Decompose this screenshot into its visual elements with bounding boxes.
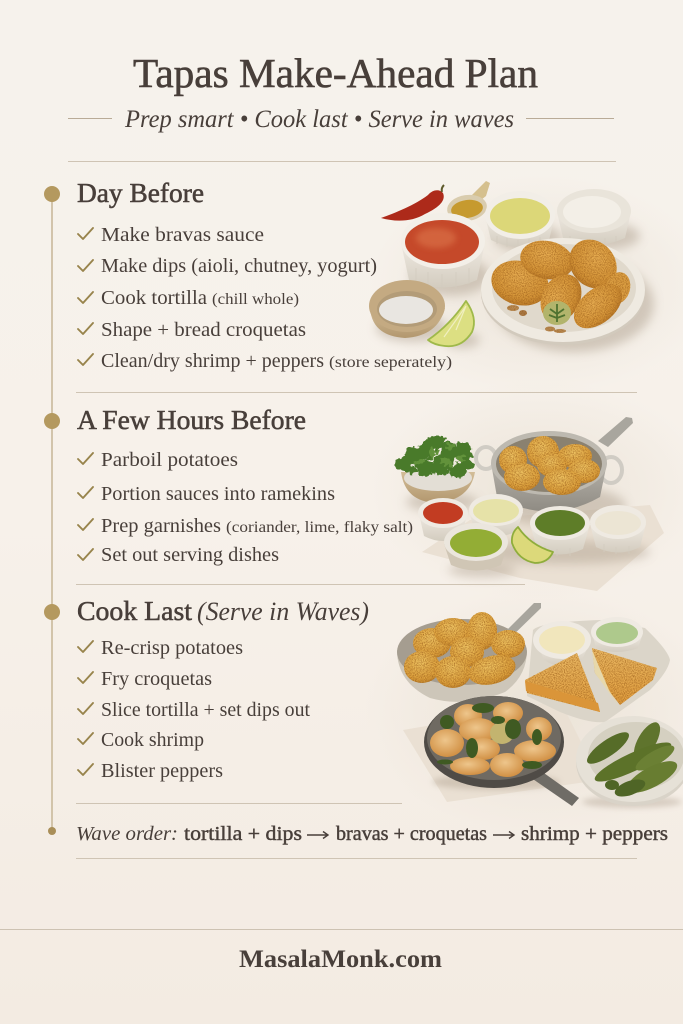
- checklist: cook last: Slice tortilla + set dips out: [101, 699, 310, 721]
- checklist: a few hours before: Portion sauces into ramekins: [101, 483, 335, 505]
- checklist: a few hours before: (coriander, lime, flaky salt): [226, 519, 413, 536]
- footer brand: MasalaMonk.com: [239, 946, 442, 973]
- heading: cook last: (Serve in Waves): [197, 597, 369, 626]
- title: Tapas Make-Ahead Plan: [133, 50, 538, 96]
- skillet: garlic shrimp: [424, 696, 579, 806]
- bowl: crispy potatoes: [397, 603, 541, 702]
- checklist: cook last: Blister peppers: [101, 760, 223, 782]
- ramekin: green chutney: [444, 523, 508, 570]
- checklist: cook last: Fry croquetas: [101, 668, 212, 690]
- checklist: day before: Make dips (aioli, chutney, yogurt): [101, 255, 377, 277]
- wave order line: shrimp + peppers: [521, 823, 668, 845]
- checklist: day before: (chill whole): [212, 291, 299, 308]
- icon: red chili: [381, 185, 444, 221]
- ramekin: yellow dip: [485, 191, 555, 249]
- bowl: flaky salt: [369, 280, 445, 338]
- heading: day before: Day Before: [77, 178, 204, 208]
- icon: lime wedge: [512, 527, 553, 563]
- ramekin: pesto: [530, 506, 590, 556]
- panel: a few hours before: [77, 405, 413, 566]
- checklist: a few hours before: Set out serving dishes: [101, 544, 279, 566]
- wave order line: tortilla + dips: [184, 823, 302, 845]
- food illustration: pot, herbs and ramekins: [396, 417, 664, 591]
- icon: honey spoon: [445, 181, 490, 224]
- checklist: a few hours before: Parboil potatoes: [101, 449, 238, 471]
- checklist: a few hours before: Prep garnishes: [101, 515, 221, 537]
- wave order line: Wave order:: [76, 823, 178, 845]
- checklist: cook last: Cook shrimp: [101, 729, 204, 751]
- plate: blistered peppers: [576, 716, 683, 806]
- timeline: [44, 186, 60, 835]
- platter: tortilla and dips: [525, 617, 670, 722]
- heading: cook last: Cook Last: [77, 596, 193, 626]
- food illustration: sauces and croquetas: [369, 181, 654, 352]
- checklist: day before: Cook tortilla: [101, 287, 207, 309]
- ramekin: red bravas sauce: [401, 213, 485, 289]
- ramekin: white sauce: [590, 505, 646, 554]
- ramekin: cream sauce: [469, 494, 523, 536]
- checklist: a few hours before: [78, 449, 413, 566]
- panel: cook last: [77, 596, 369, 782]
- ramekin: white dip: [557, 189, 631, 248]
- panel: day before: [77, 178, 452, 372]
- shadows: [376, 222, 654, 352]
- parchment paper: [422, 505, 664, 591]
- checklist: day before: Make bravas sauce: [101, 224, 264, 246]
- checklist: day before: Shape + bread croquetas: [101, 319, 306, 341]
- heading: a few hours before: A Few Hours Before: [77, 405, 306, 435]
- checklist: day before: [78, 224, 452, 372]
- icon: lime wedge: [428, 301, 474, 346]
- food illustration: potatoes, tortilla, shrimp and peppers: [397, 603, 683, 808]
- ramekin: red sauce: [418, 498, 468, 541]
- checklist: cook last: [78, 637, 310, 782]
- wave order line: bravas + croquetas: [336, 823, 487, 845]
- bowl: coriander: [396, 434, 475, 503]
- pot: parboiled potatoes: [476, 417, 633, 512]
- checklist: cook last: Re-crisp potatoes: [101, 637, 243, 659]
- heading: cook last: [77, 596, 369, 626]
- parchment paper: [403, 700, 600, 802]
- checklist: day before: Clean/dry shrimp + peppers: [101, 350, 324, 372]
- checklist: day before: (store seperately): [329, 354, 452, 371]
- wave order line: [76, 823, 668, 845]
- arrow: [307, 832, 328, 838]
- plate: croquetas: [481, 230, 645, 345]
- subtitle with side rules: Prep smart • Cook last • Serve in waves: [124, 106, 514, 133]
- arrow: [493, 832, 514, 838]
